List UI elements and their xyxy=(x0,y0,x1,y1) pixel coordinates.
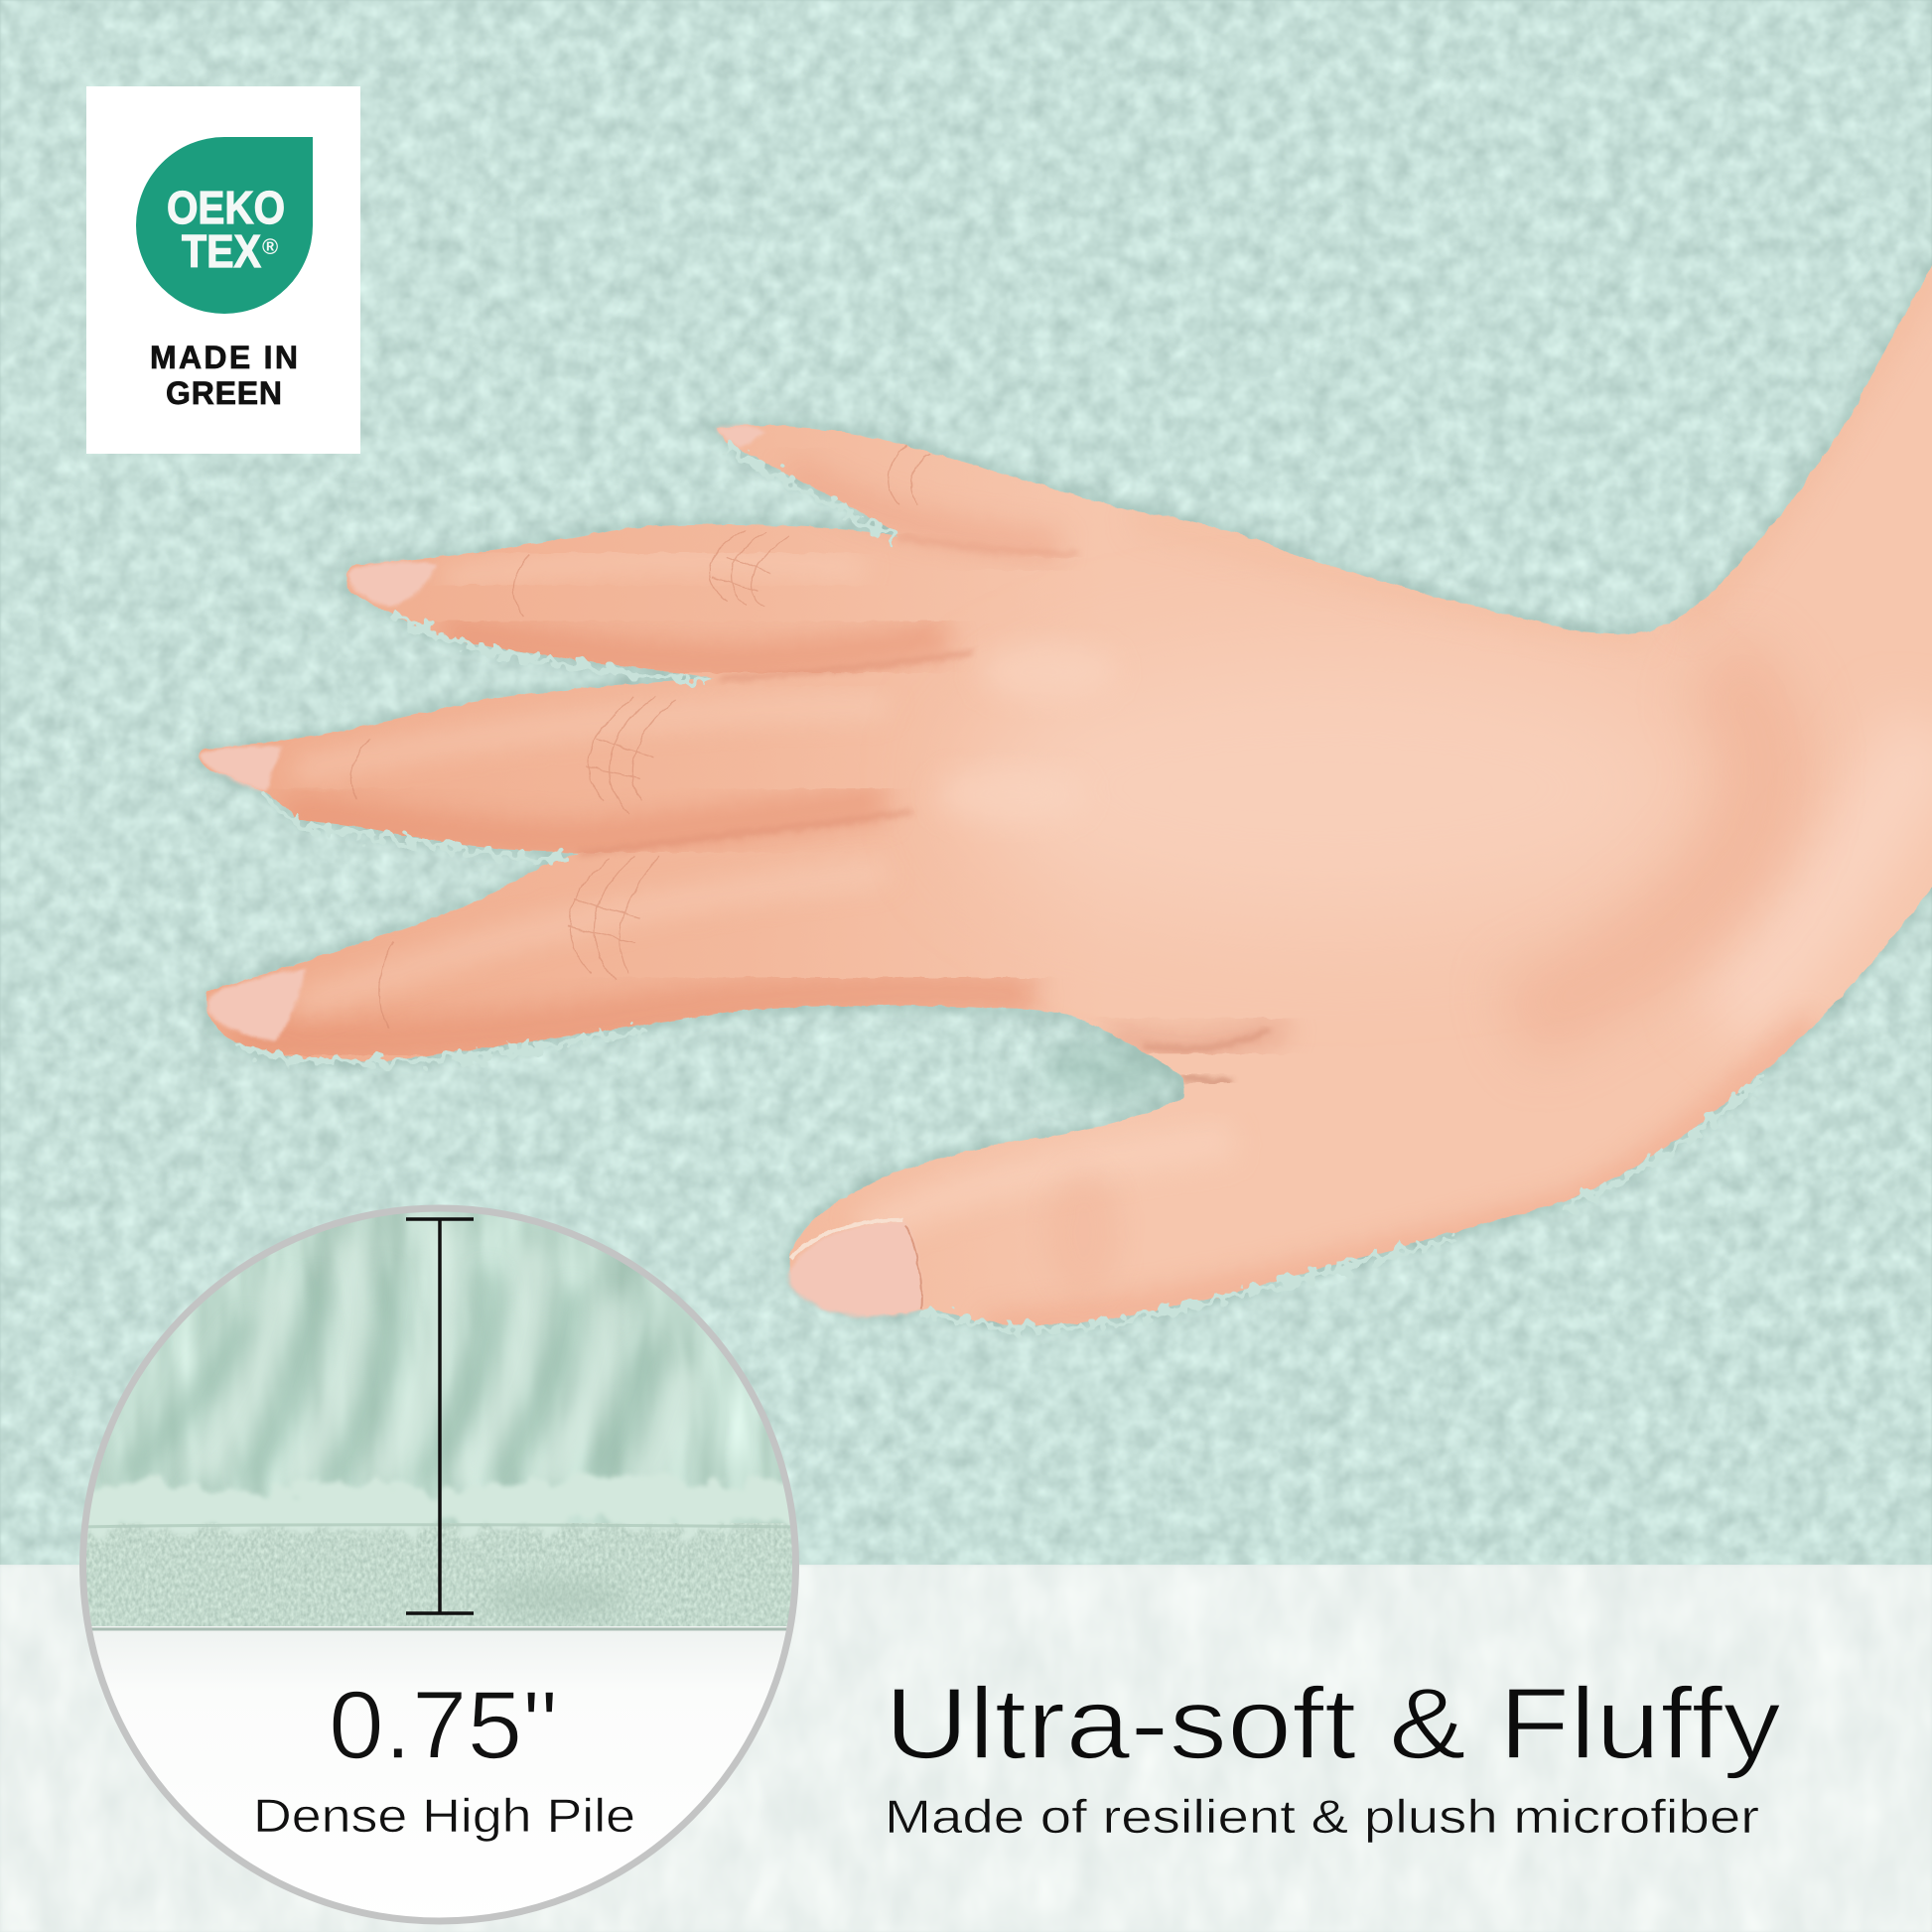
hand shape with shading xyxy=(185,265,1932,1343)
subheading: Made of resilient & plush microfiber xyxy=(885,1790,1759,1843)
broad light area on back of hand xyxy=(1003,677,1638,899)
badge caption: MADE IN xyxy=(150,340,298,375)
mat backing band xyxy=(79,1523,799,1626)
shadow under the mat xyxy=(79,1628,799,1629)
pile caption: Dense High Pile xyxy=(253,1789,635,1842)
upper wrist edge shade xyxy=(1686,278,1928,614)
seam line xyxy=(79,1525,799,1527)
fur tufts overlapping the finger edges xyxy=(240,450,1762,1328)
pale wrist highlight xyxy=(1725,727,1932,1023)
darker wrist band xyxy=(1516,665,1765,1023)
headline: Ultra-soft & Fluffy xyxy=(885,1667,1781,1780)
pile height magnifier circle xyxy=(69,1201,814,1932)
fingernails xyxy=(200,426,922,1316)
OEKO TEX wordmark: ® xyxy=(262,234,278,259)
upper hand edge shade xyxy=(1489,610,1490,611)
lower hand edge shade xyxy=(986,1023,1811,1328)
OEKO TEX wordmark: TEX xyxy=(182,225,261,277)
finger top highlights xyxy=(444,559,863,579)
measurement bracket xyxy=(406,1219,474,1613)
OEKO TEX wordmark xyxy=(167,182,285,277)
circle outline xyxy=(83,1208,796,1921)
badge caption: GREEN xyxy=(166,375,282,411)
finger underside shades xyxy=(444,630,949,663)
shadow between fingers xyxy=(721,652,973,679)
knuckle wrinkles xyxy=(350,446,930,1029)
pile height value: 0.75" xyxy=(329,1671,558,1779)
tall pile fibers xyxy=(79,1201,799,1529)
darker worn patch on backing xyxy=(486,1579,625,1618)
icon: OEKO-TEX leaf drop xyxy=(136,137,313,314)
hand pressing into the fabric xyxy=(185,265,1932,1343)
knuckle highlights xyxy=(980,642,1115,701)
thumb web crease shadow xyxy=(1109,1026,1287,1047)
white surface below the mat xyxy=(79,1624,799,1932)
OEKO TEX wordmark: OEKO xyxy=(167,182,285,233)
certification badge xyxy=(86,86,360,454)
badge caption xyxy=(150,340,298,411)
white fabric band at the bottom xyxy=(0,1565,1932,1932)
thumb joint shading xyxy=(1047,1171,1121,1294)
tufts along the seam xyxy=(69,1476,814,1529)
pile ridges xyxy=(134,1231,685,1479)
fur hollow shadow between index finger and thumb xyxy=(1041,1037,1189,1102)
thumb nail cuticle xyxy=(791,1220,903,1259)
pressed-in shadow around the hand xyxy=(200,265,1932,1325)
warm tint over the fingers xyxy=(199,425,937,1311)
